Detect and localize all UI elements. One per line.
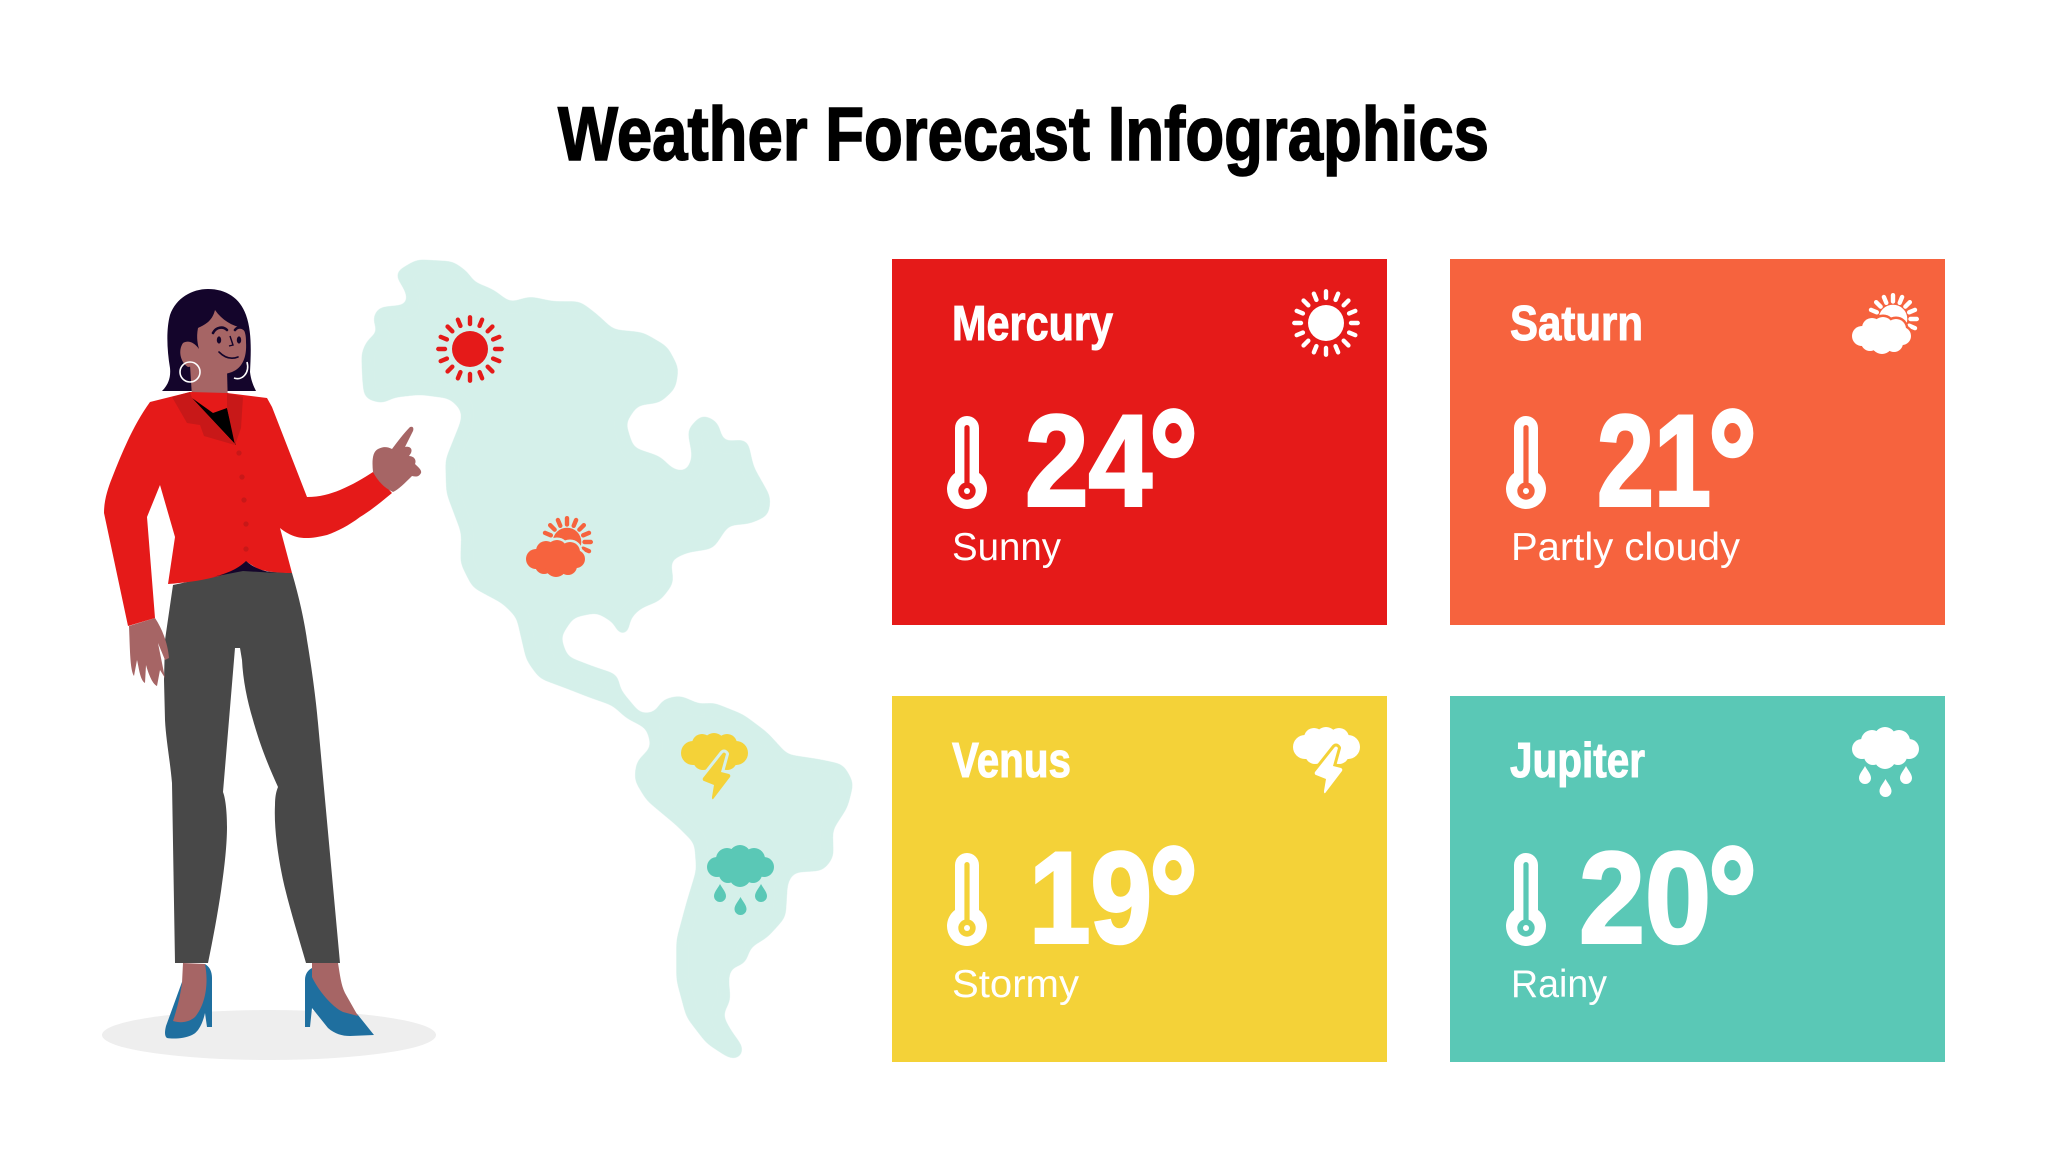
condition label: Rainy <box>1511 963 1607 1006</box>
temperature: ° <box>1149 378 1198 546</box>
condition label: Stormy <box>952 963 1080 1006</box>
left shoe <box>165 964 212 1039</box>
city name: Saturn <box>1510 297 1643 351</box>
lower hand <box>129 618 169 686</box>
thermometer icon <box>947 416 987 509</box>
title: Weather Forecast Infographics <box>558 92 1489 177</box>
thermometer icon <box>1506 416 1546 509</box>
right shoe <box>305 968 374 1036</box>
temperature: 19 <box>1029 824 1152 970</box>
card background <box>892 259 1387 625</box>
temperature: 20 <box>1579 824 1711 970</box>
panel: Venus <box>892 696 1387 1062</box>
condition label: Partly cloudy <box>1511 526 1741 569</box>
left foot <box>173 963 207 1022</box>
card background <box>892 696 1387 1062</box>
jacket <box>104 392 392 626</box>
ground shadow <box>102 1010 436 1060</box>
jacket hem shadow <box>207 561 277 578</box>
panel: Mercury <box>892 259 1387 625</box>
weather icon: rain <box>1852 727 1919 797</box>
card background <box>1450 696 1945 1062</box>
city name: Venus <box>952 734 1071 788</box>
card background <box>1450 259 1945 625</box>
condition label: Sunny <box>952 526 1061 569</box>
map icon: rain <box>707 845 774 915</box>
hair <box>162 289 256 391</box>
weather icon: sun <box>1294 291 1358 355</box>
black undershirt <box>192 398 236 445</box>
jacket collar <box>172 392 243 445</box>
eyes and mouth <box>213 327 246 358</box>
weather icon: partly cloudy <box>1852 295 1917 354</box>
temperature: ° <box>1708 816 1757 984</box>
pointing hand <box>373 427 421 492</box>
right foot <box>312 963 358 1016</box>
panel: Jupiter <box>1450 696 1945 1062</box>
neck <box>190 365 228 414</box>
weather icon: storm <box>1293 727 1360 793</box>
temperature: ° <box>1708 378 1757 546</box>
map icon: sun <box>438 317 502 381</box>
thermometer icon <box>1506 853 1546 946</box>
thermometer icon <box>947 853 987 946</box>
map landmass <box>362 260 853 1058</box>
illustration: woman presenter <box>102 289 436 1060</box>
face <box>180 310 246 374</box>
panel: Saturn <box>1450 259 1945 625</box>
temperature: ° <box>1149 816 1198 984</box>
city name: Jupiter <box>1510 734 1645 788</box>
city name: Mercury <box>952 297 1113 351</box>
jacket buttons <box>236 450 249 552</box>
map of the Americas <box>362 260 853 1058</box>
map icon: partly cloudy <box>526 518 591 577</box>
earrings <box>180 362 248 382</box>
temperature: 24 <box>1025 388 1152 534</box>
map icon: storm <box>681 733 748 799</box>
temperature: 21 <box>1597 388 1711 534</box>
trousers <box>164 570 340 963</box>
